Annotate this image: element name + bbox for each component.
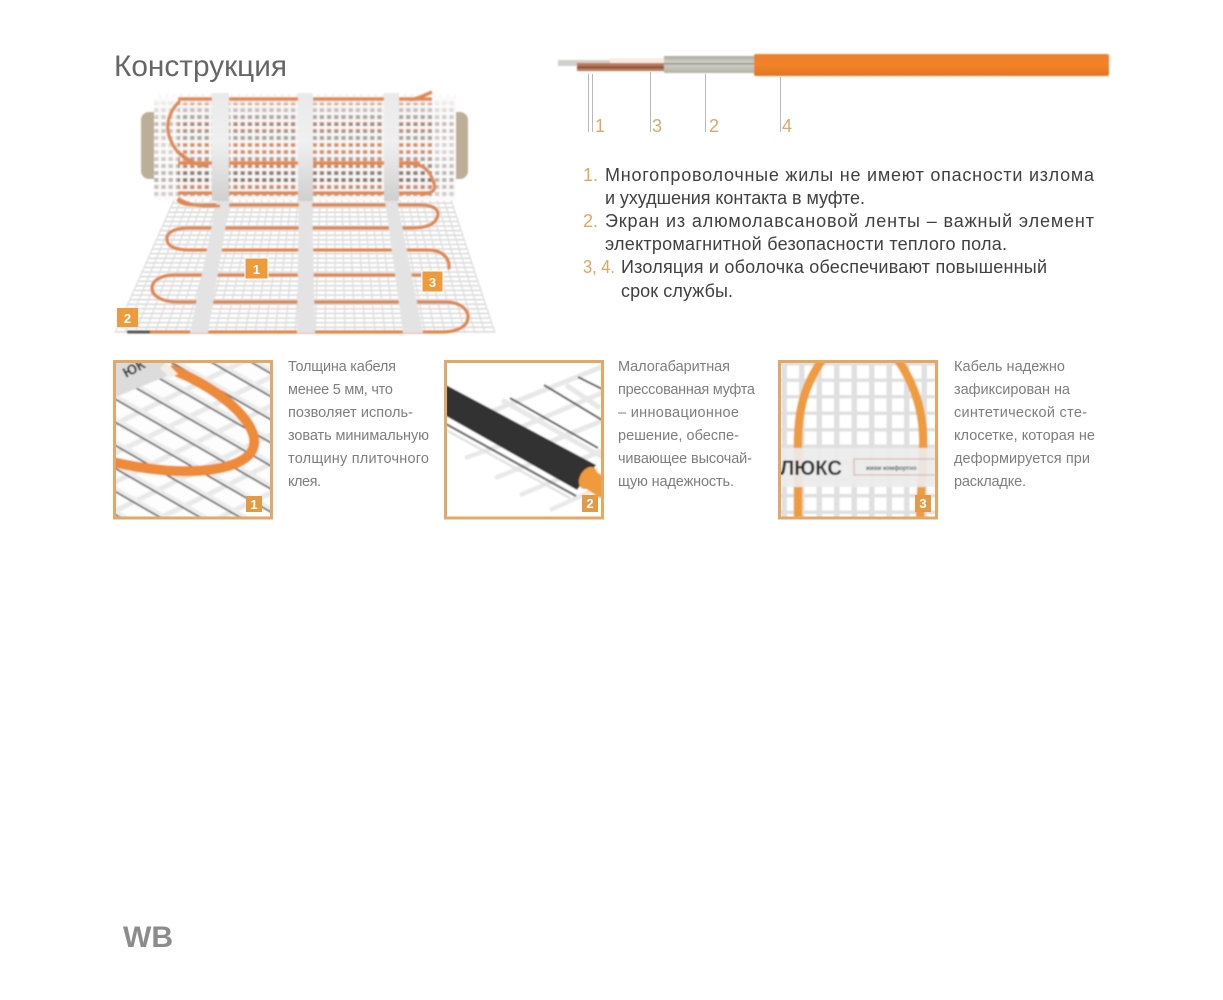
caption 1: позволяет исполь- (288, 405, 413, 421)
roll right end cap (447, 112, 468, 179)
flat cable serpentine (150, 200, 468, 332)
caption 1: клея. (288, 474, 321, 490)
cable cross-section diagram (558, 54, 1109, 136)
description list: 1. (583, 165, 598, 185)
caption 2: Малогабаритная (618, 359, 730, 375)
description list: электромагнитной безопасности теплого пола. (605, 234, 1007, 254)
caption 2: решение, обеспе- (618, 428, 739, 444)
watermark: WB (123, 921, 173, 954)
badge 2 on mat: 2 (124, 311, 131, 326)
flat fixing strips (190, 200, 423, 333)
title: Конструкция (114, 50, 287, 83)
roll fixing strips (212, 93, 399, 201)
caption 2: чивающее высочай- (618, 451, 752, 467)
thumbnail 2: pressed coupling: 2 (586, 496, 594, 511)
roll left end cap (141, 112, 163, 179)
caption 1: толщину плиточного (288, 451, 429, 467)
caption 3: Кабель надежно (954, 359, 1065, 375)
description list (583, 165, 1095, 301)
leader labels: 2 (709, 116, 719, 136)
thumbnail 3: fixed cable on mesh: ЛЮКС (780, 457, 842, 480)
description list: и ухудшения контакта в муфте. (605, 188, 865, 208)
caption 2: щую надежность. (618, 474, 734, 490)
caption 3: синтетической сте- (954, 405, 1087, 421)
leader labels: 3 (652, 116, 662, 136)
badge 1 on mat: 1 (253, 262, 260, 277)
description list: 3, 4. (583, 257, 615, 277)
leader lines (588, 72, 780, 132)
thumbnail 1: thin cable (113, 356, 273, 520)
caption 1: зовать минимальную (288, 428, 429, 444)
badge 3 on mat (422, 271, 443, 292)
description list: Экран из алюмолавсановой ленты – важный элемент (605, 211, 1094, 231)
caption 3: раскладке. (954, 474, 1026, 490)
thumbnail 3: fixed cable on mesh: живи комфортно (865, 465, 917, 472)
thumbnail 1: thin cable: ЮК (120, 356, 148, 381)
leader labels: 4 (782, 116, 792, 136)
badge 1 on mat (245, 258, 268, 279)
cold lead end (127, 330, 150, 334)
caption 3: деформируется при (954, 451, 1090, 467)
description list: срок службы. (621, 281, 733, 301)
description list: 2. (583, 211, 598, 231)
caption 1 (288, 359, 429, 490)
thumbnail 1: thin cable: 1 (250, 497, 258, 512)
leader labels: 1 (595, 116, 605, 136)
caption 1: менее 5 мм, что (288, 382, 393, 398)
caption 2: прессованная муфта (618, 382, 756, 398)
roll body (154, 92, 456, 206)
thumbnail 2: pressed coupling (444, 360, 606, 520)
caption 3: зафиксирован на (954, 382, 1071, 398)
description list: Многопроволочные жилы не имеют опасности излома (605, 165, 1095, 185)
caption 2: – инновационное (618, 405, 739, 421)
flat unrolled mesh (115, 200, 495, 335)
badge 2 on mat (117, 308, 138, 327)
badge 3 on mat: 3 (429, 275, 436, 290)
thumbnail 3: fixed cable on mesh (778, 360, 944, 520)
caption 3: клосетке, которая не (954, 428, 1095, 444)
description list: Изоляция и оболочка обеспечивают повышенный (621, 257, 1047, 277)
caption 3 (954, 359, 1095, 490)
caption 2 (618, 359, 756, 490)
illustration: heating mat roll (115, 92, 495, 335)
cable layers (558, 54, 1109, 76)
thumbnail 3: fixed cable on mesh: 3 (919, 496, 927, 511)
leader labels (595, 116, 792, 136)
caption 1: Толщина кабеля (288, 359, 396, 375)
